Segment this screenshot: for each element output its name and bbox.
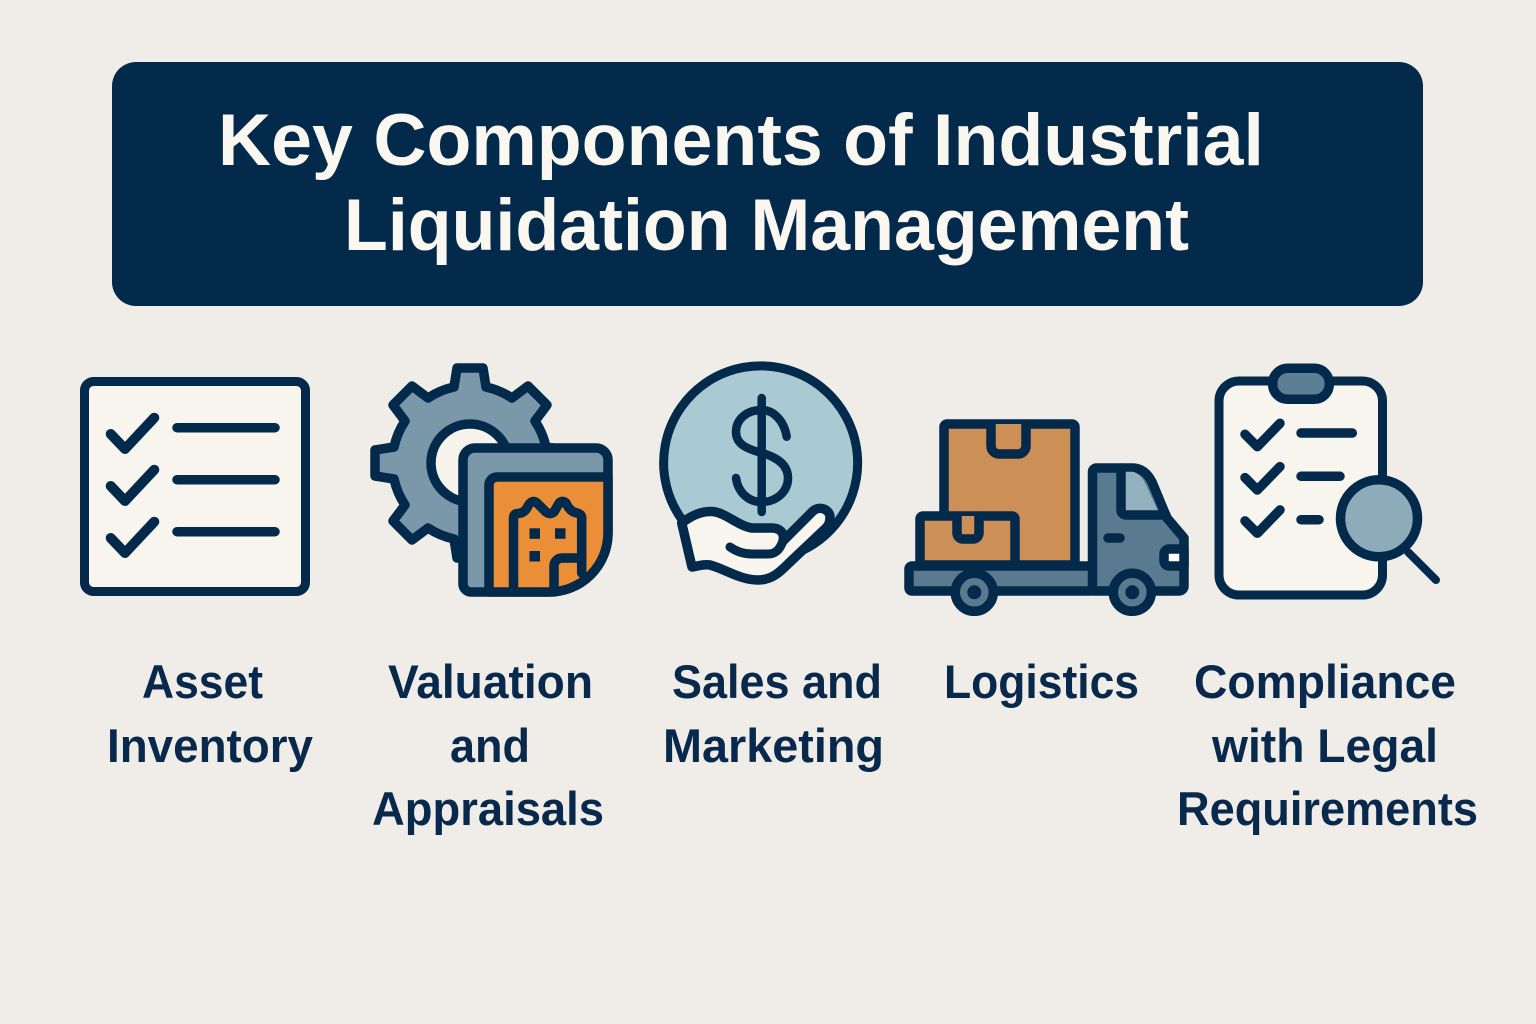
label: Compliance with Legal Requirements: Requirements (1177, 782, 1478, 835)
label: Compliance with Legal Requirements: Compliance (1194, 655, 1456, 708)
building windows (530, 528, 566, 562)
icon: logistics truck (909, 424, 1184, 611)
title text: Key Components of Industrial (218, 100, 1264, 181)
headlight (1164, 549, 1184, 566)
label: Compliance with Legal Requirements: with Legal (1211, 719, 1438, 772)
label: Asset Inventory: Asset (142, 655, 263, 708)
icon: sales coin and hand (664, 366, 858, 580)
dollar sign (736, 398, 788, 512)
label: Compliance with Legal Requirements (1177, 655, 1478, 835)
icon: compliance clipboard and magnifier (1219, 368, 1436, 595)
label: Valuation and Appraisals: Appraisals (372, 782, 604, 835)
door handle (1108, 533, 1120, 543)
valuation card (463, 448, 608, 592)
label: Sales and Marketing: Sales and (672, 655, 882, 708)
label: Valuation and Appraisals: Valuation (388, 655, 593, 708)
magnifier (1340, 480, 1436, 580)
label: Logistics: Logistics (944, 655, 1139, 708)
title text (218, 100, 1264, 266)
title banner (112, 62, 1423, 306)
clipboard clip (1273, 368, 1329, 399)
small box (920, 516, 1015, 565)
gear (375, 368, 565, 558)
large box (944, 424, 1075, 565)
title text: Liquidation Management (344, 185, 1189, 266)
checklist marks (1245, 423, 1280, 533)
hand (682, 508, 830, 580)
icon: valuation gear and building (375, 368, 608, 592)
icon: asset inventory checklist (84, 382, 306, 592)
label: Sales and Marketing: Marketing (663, 719, 884, 772)
coin (664, 366, 858, 567)
label: Sales and Marketing (663, 655, 884, 772)
cab window (1125, 472, 1158, 511)
label: Valuation and Appraisals (372, 655, 604, 835)
clipboard (1219, 381, 1382, 595)
left wheel (955, 573, 993, 611)
label: Asset Inventory: Inventory (107, 719, 313, 772)
right wheel (1113, 573, 1151, 611)
label: Valuation and Appraisals: and (450, 719, 530, 772)
label: Asset Inventory (107, 655, 313, 772)
truck cab (1092, 468, 1184, 591)
building (514, 501, 582, 592)
orange building panel (489, 477, 608, 592)
truck bed (909, 566, 1093, 591)
